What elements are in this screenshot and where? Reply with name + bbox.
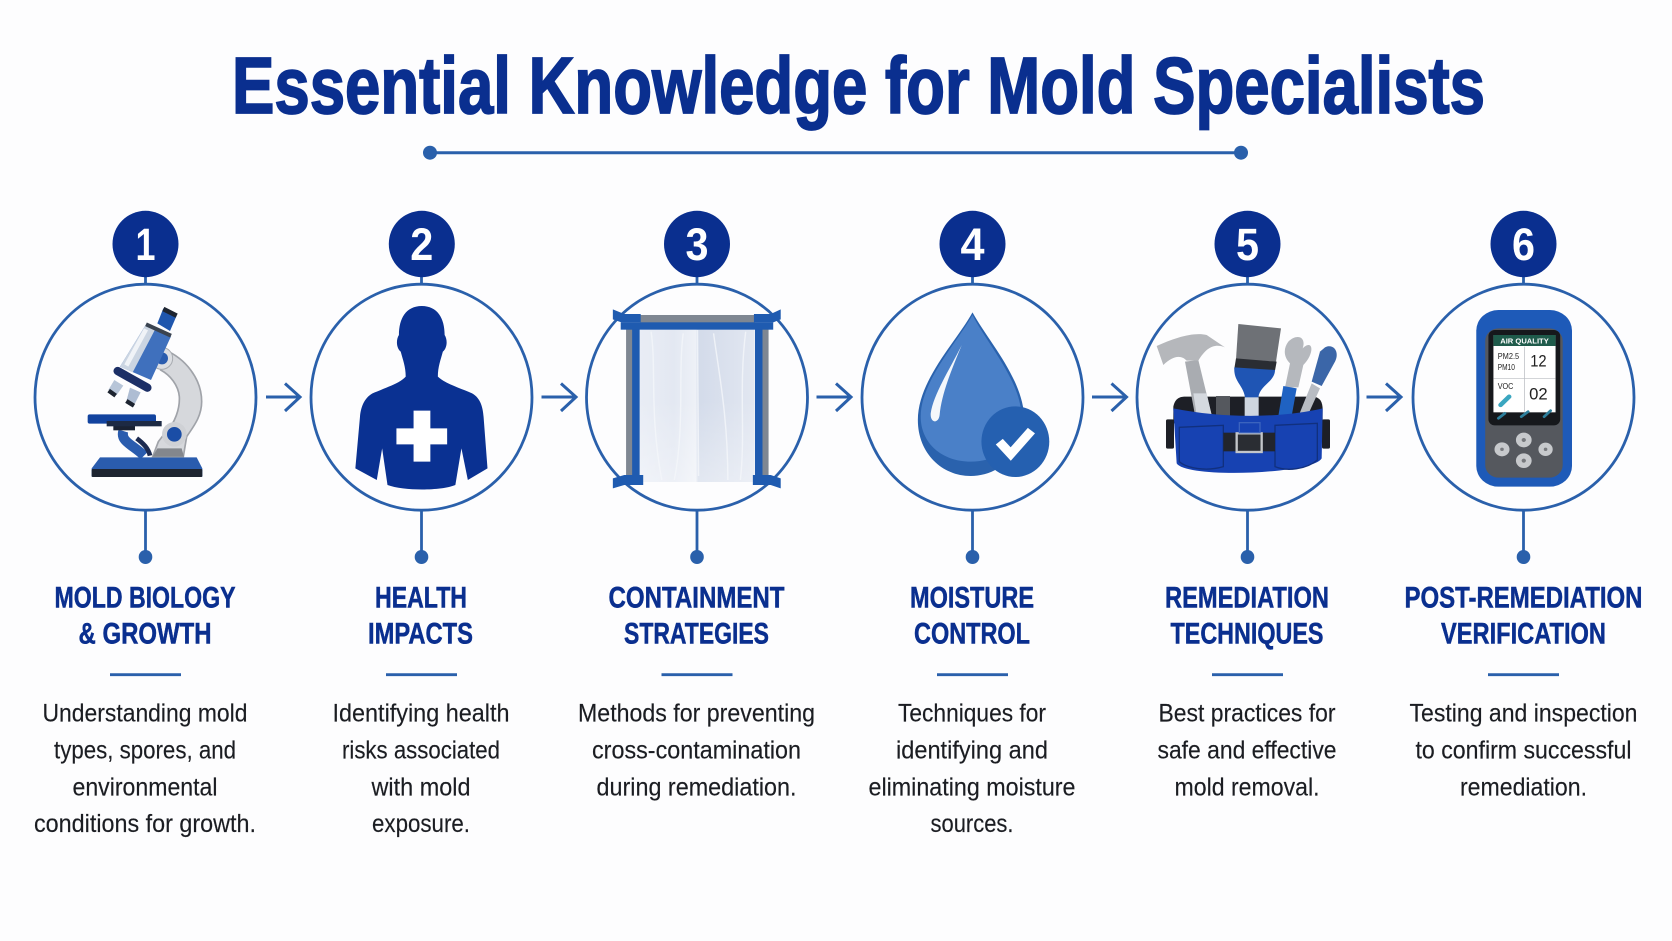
heading 3	[608, 582, 784, 650]
connector 1	[139, 511, 152, 564]
badge 6	[1490, 211, 1556, 285]
icon: human torso with cross	[355, 306, 487, 489]
icon: air quality meter: PM2.5	[1498, 351, 1519, 361]
panel: containment strategies	[578, 211, 815, 801]
icon: air quality meter: VOC	[1498, 381, 1513, 391]
circle frame 3	[586, 284, 808, 510]
heading 5: REMEDIATION	[1165, 582, 1329, 615]
heading 6	[1404, 582, 1642, 650]
description 2: exposure.	[372, 810, 470, 838]
arrow 1 to 2	[266, 384, 300, 411]
badge 3: 3	[686, 219, 708, 270]
heading 3: CONTAINMENT	[608, 582, 784, 615]
divider 6	[1488, 673, 1559, 676]
description 6: to confirm successful	[1416, 736, 1632, 764]
panel: health impacts	[311, 211, 532, 838]
connector 6	[1517, 511, 1530, 564]
heading 5	[1165, 582, 1329, 650]
arrow 3 to 4	[816, 384, 851, 411]
divider 4	[937, 673, 1008, 676]
description 6	[1410, 700, 1638, 801]
heading 2	[368, 582, 473, 650]
circle frame 5	[1137, 284, 1358, 510]
panel: moisture control	[862, 211, 1083, 838]
heading 1: & GROWTH	[78, 618, 212, 650]
heading 5: TECHNIQUES	[1170, 618, 1324, 650]
heading 4: CONTROL	[914, 618, 1030, 650]
panel: post-remediation verification	[1404, 211, 1642, 801]
description 5: Best practices for	[1158, 700, 1336, 728]
icon: water drop with check	[918, 312, 1049, 477]
icon: air quality meter: 02	[1529, 384, 1548, 403]
description 2: risks associated	[342, 736, 500, 764]
heading 4: MOISTURE	[910, 582, 1034, 615]
description 6: Testing and inspection	[1410, 700, 1638, 728]
icon: microscope	[88, 308, 202, 477]
description 3: during remediation.	[596, 773, 796, 801]
description 1: types, spores, and	[54, 736, 236, 764]
panel: mold biology and growth	[34, 211, 256, 838]
description 5	[1158, 700, 1336, 801]
description 1: conditions for growth.	[34, 810, 256, 838]
description 3: cross-contamination	[592, 736, 801, 764]
description 1: Understanding mold	[42, 700, 248, 728]
circle frame 4	[862, 284, 1083, 510]
badge 1	[112, 211, 178, 285]
description 6: remediation.	[1460, 773, 1587, 801]
heading 3: STRATEGIES	[624, 618, 769, 650]
description 1	[34, 700, 256, 838]
icon: air quality meter: AIR QUALITY	[1500, 337, 1549, 345]
description 2	[332, 700, 510, 838]
description 4: eliminating moisture	[868, 773, 1076, 801]
description 3: Methods for preventing	[578, 700, 815, 728]
icon: plastic containment barrier	[613, 309, 781, 488]
icon: air quality meter: 12	[1530, 351, 1547, 370]
title rule	[423, 146, 1248, 160]
divider 2	[386, 673, 457, 676]
connector 3	[690, 511, 704, 564]
heading 1	[54, 582, 236, 650]
badge 6: 6	[1512, 219, 1535, 270]
description 5: safe and effective	[1158, 736, 1336, 764]
icon: tool belt	[1157, 324, 1337, 473]
divider 3	[662, 673, 732, 676]
badge 4	[940, 211, 1006, 285]
badge 3	[664, 211, 730, 285]
description 4	[868, 700, 1076, 838]
description 4: sources.	[930, 810, 1014, 838]
divider 1	[110, 673, 181, 676]
connector 4	[966, 511, 979, 564]
icon: air quality meter: PM10	[1498, 362, 1515, 372]
heading 1: MOLD BIOLOGY	[54, 582, 236, 615]
connector 5	[1241, 511, 1254, 564]
badge 4: 4	[960, 219, 984, 270]
description 4: Techniques for	[898, 700, 1046, 728]
circle frame 2	[311, 284, 532, 510]
badge 2: 2	[410, 219, 433, 270]
description 2: Identifying health	[332, 700, 510, 728]
panel: remediation techniques	[1137, 211, 1358, 801]
circle frame 1	[35, 284, 256, 510]
description 4: identifying and	[896, 736, 1048, 764]
icon: air quality meter	[1476, 310, 1572, 487]
heading 4	[910, 582, 1034, 650]
description 5: mold removal.	[1174, 773, 1320, 801]
arrow 4 to 5	[1092, 384, 1126, 411]
heading 6: VERIFICATION	[1441, 618, 1606, 650]
divider 5	[1212, 673, 1283, 676]
description 1: environmental	[72, 773, 218, 801]
badge 5	[1214, 211, 1280, 285]
badge 2	[389, 211, 455, 285]
description 3	[578, 700, 815, 801]
connector 2	[415, 511, 428, 564]
heading 2: IMPACTS	[368, 618, 473, 650]
badge 5: 5	[1236, 219, 1259, 270]
heading 2: HEALTH	[375, 582, 467, 615]
arrow 2 to 3	[542, 384, 576, 411]
badge 1: 1	[136, 219, 156, 270]
arrow 5 to 6	[1366, 384, 1401, 411]
circle frame 6	[1413, 284, 1634, 510]
description 2: with mold	[371, 773, 470, 801]
